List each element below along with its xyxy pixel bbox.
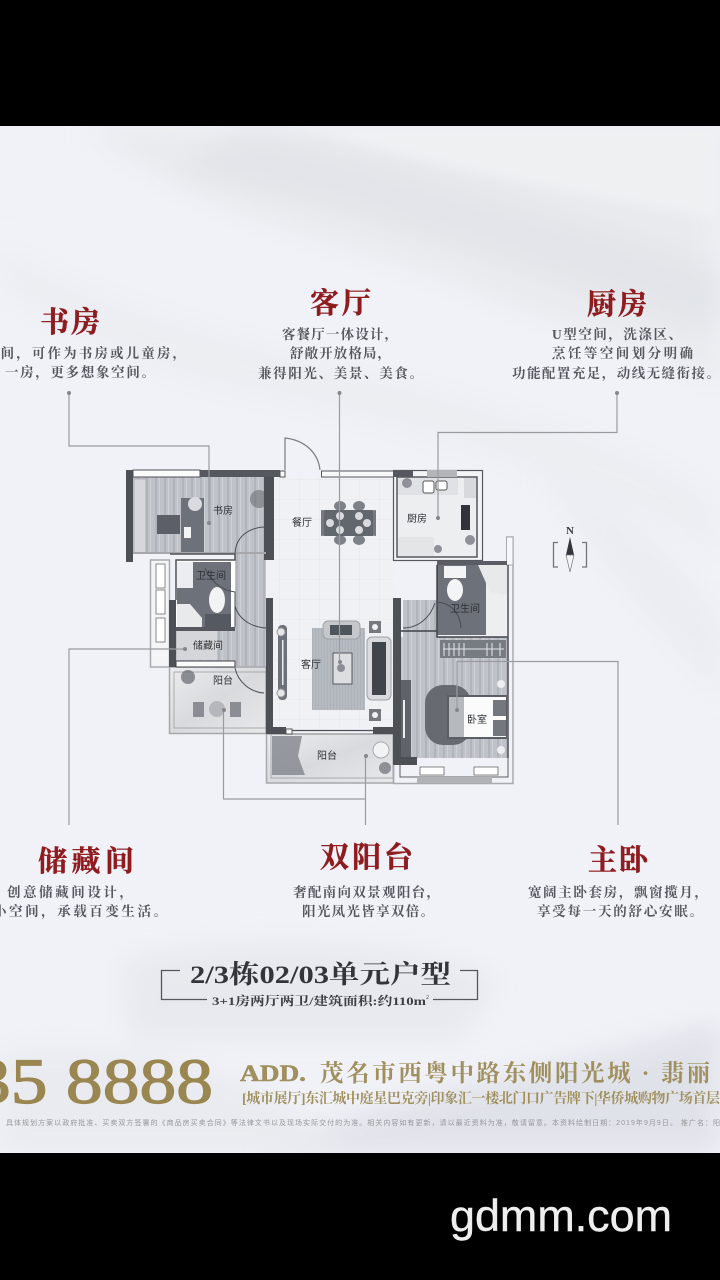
room: master bedroom	[401, 600, 508, 758]
room: dining and living floor	[274, 477, 394, 728]
watermark: gdmm.com	[450, 1192, 672, 1241]
room labels: 厨房	[407, 512, 427, 525]
floor plan	[126, 438, 513, 784]
doors	[205, 438, 461, 693]
room: study	[133, 477, 268, 554]
text: study description	[0, 345, 186, 381]
heading: master bedroom: 主卧	[588, 844, 651, 877]
icon: north compass: N	[566, 525, 574, 537]
heading: study: 书房	[40, 305, 100, 339]
icon: north compass	[554, 525, 586, 572]
text: kitchen description: 烹饪等空间划分明确	[552, 345, 694, 361]
text: living room description: 兼得阳光、美景、美食。	[258, 365, 423, 381]
text: kitchen description: 功能配置充足，动线无缝衔接。	[512, 365, 720, 382]
room labels: 书房	[213, 504, 233, 517]
unit title block	[162, 960, 478, 1008]
room labels: 卧室	[467, 713, 487, 726]
heading: kitchen: 厨房	[587, 287, 647, 321]
room: bottom balcony	[266, 734, 394, 783]
furniture: dining table	[321, 501, 376, 545]
text: kitchen description	[512, 326, 720, 382]
heading: storage room: 储藏间	[38, 845, 134, 878]
text: living room description	[258, 326, 423, 381]
room labels: 客厅	[301, 658, 321, 671]
room: hallway	[235, 553, 266, 667]
room: bathroom 1	[176, 560, 235, 627]
address: 茂名市西粤中路东侧阳光城 · 翡丽	[320, 1060, 713, 1087]
text: balcony description: 奢配南向双景观阳台，	[293, 884, 440, 901]
furniture: living room set	[277, 621, 391, 721]
room labels: 卫生间	[196, 569, 226, 582]
room labels: 储藏间	[193, 639, 223, 652]
room labels: 卫生间	[450, 602, 480, 615]
unit title block: 2/3栋02/03单元户型	[190, 960, 451, 989]
text: kitchen description: U型空间，洗涤区、	[552, 326, 682, 343]
text: living room description: 客餐厅一体设计，	[282, 326, 398, 343]
unit title block: 2	[426, 995, 429, 1001]
room: left balcony	[170, 667, 266, 734]
text: master bedroom description	[528, 884, 708, 919]
text: master bedroom description: 宽阔主卧套房，飘窗揽月，	[528, 884, 708, 901]
walls	[126, 470, 508, 765]
heading: living room: 客厅	[310, 287, 371, 320]
room: storage	[176, 631, 235, 661]
heading: double balcony: 双阳台	[320, 841, 414, 874]
text: study description: 一房，更多想象空间。	[5, 364, 155, 381]
text: master bedroom description: 享受每一天的舒心安眠。	[537, 903, 703, 919]
room labels: 阳台	[317, 749, 337, 762]
room: kitchen	[394, 470, 482, 560]
address: ADD.	[240, 1061, 306, 1086]
text: balcony description	[293, 884, 440, 919]
room: left service closet	[150, 560, 170, 667]
legal disclaimer: 具体规划方案以政府批准、买卖双方签署的《商品房买卖合同》等法律文书以及现场实际交付的为准。相关内容如有更新，请以最近资料为准，敬请留意。本资料绘制日期：2019年9月9日。 推广名：阳	[6, 1118, 720, 1127]
text: balcony description: 阳光凤光皆享双倍。	[302, 903, 434, 919]
room labels: 餐厅	[292, 516, 312, 529]
room labels: 阳台	[213, 674, 233, 687]
text: living room description: 舒敞开放格局，	[290, 345, 391, 362]
room: bathroom 2	[437, 565, 507, 635]
text: storage description	[0, 884, 167, 920]
unit title block: 3+1房两厅两卫/建筑面积:约110m	[212, 993, 426, 1008]
address: [城市展厅]东汇城中庭星巴克旁|印象汇一楼北门口广告牌下|华侨城购物广场首层	[242, 1090, 720, 1107]
callout dots	[67, 391, 619, 758]
room labels	[193, 504, 487, 762]
text: storage description: 创意储藏间设计，	[7, 884, 133, 901]
room: air conditioner ledge	[394, 537, 513, 784]
address	[240, 1060, 720, 1107]
callout lines	[69, 393, 618, 825]
